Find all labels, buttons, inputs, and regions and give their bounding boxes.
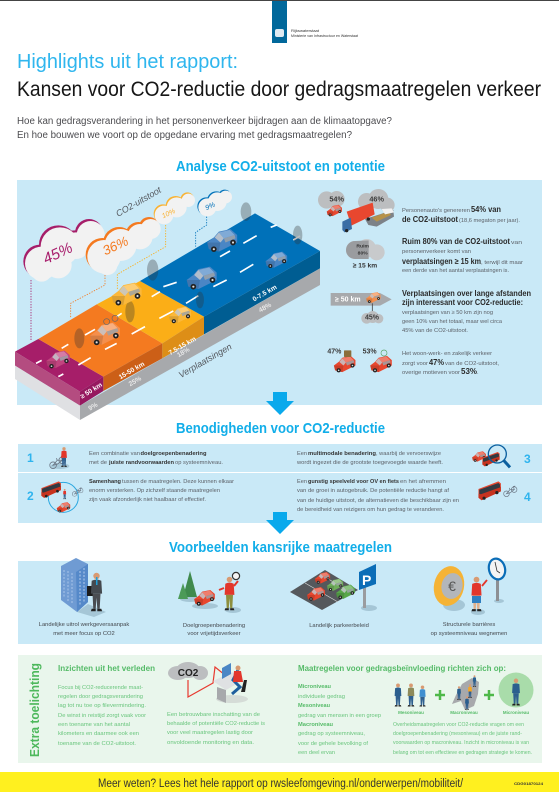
fact: 80 percent long trips: van: [511, 240, 522, 246]
axis label: CO2-uitstoot: CO2-uitstoot: [114, 185, 163, 219]
title: [17, 51, 541, 101]
dotted connectors: [31, 217, 207, 340]
fact: passenger cars: Personenauto's genereren: [402, 208, 470, 214]
label: at least 15 km: ≥ 15 km: [353, 263, 377, 270]
example: structural barriers: Structurele barrières: [443, 622, 495, 628]
segment labels: 18%: [176, 346, 191, 359]
text: monitoring: [167, 712, 265, 746]
intro questions: [17, 116, 392, 141]
text: gunstig speelveld: van de groei in autogebruik. De potentiële reductie hangt af: [297, 488, 449, 494]
numbers: 1: [27, 451, 34, 465]
text: inzichten: toename van de CO2-uitstoot.: [58, 741, 136, 747]
text: inzichten: [58, 685, 146, 747]
text: niveaus: gedrag op systeemniveau,: [298, 731, 365, 737]
text: overheidsmaatregelen: voorwaarden op macroniveau. Inzicht in microniveau is van: [393, 740, 529, 746]
arrow: at least 50 km: [331, 292, 392, 312]
road markings: [36, 225, 300, 377]
text: inzichten: regelen door gedragsverandering: [58, 694, 143, 700]
text: niveaus: [298, 684, 381, 756]
intro questions: Hoe kan gedragsverandering in het personenverkeer bijdragen aan de klimaatopgave?: [17, 116, 392, 127]
fact: long distance: 45% van de CO2-uitstoot.: [402, 328, 468, 334]
icon: commuting car 47 percent: 47%: [327, 348, 342, 355]
fact: commuting share: .: [477, 370, 479, 376]
footer bar: Meer weten? Lees het hele rapport op rwsleefomgeving.nl/onderwerpen/mobiliteit/: [98, 778, 464, 790]
text: monitoring: behaalde of potentiële CO2-reductie is: [167, 721, 265, 727]
panel: examples: [18, 557, 542, 644]
labels 54 and 46 percent: 54%: [329, 195, 344, 204]
text: monitoring: voor veel maatregelen lastig door: [167, 730, 253, 736]
text: monitoring: onvoldoende monitoring en data.: [167, 740, 254, 746]
text: niveaus: Microniveau: [298, 684, 332, 690]
cloud: ruim 80 percent: Ruim: [356, 244, 369, 250]
text: monitoring: Een betrouwbare inschatting van de: [167, 712, 260, 718]
fact: 80 percent long trips: een derde van het aantal verplaatsingen is.: [402, 268, 509, 274]
icon: mesoniveau group: Mesoniveau: [398, 710, 424, 715]
icon: mesoniveau group: [395, 683, 426, 715]
panel: extra toelichting: [18, 655, 542, 763]
numbers: 4: [524, 490, 531, 504]
panel: requirements: [18, 444, 542, 523]
segment labels: 9%: [87, 402, 99, 412]
fact: commuting share: [402, 351, 499, 376]
fact: passenger cars: de CO2-uitstoot: [402, 215, 458, 224]
cloud: 45 percent: 45%: [365, 315, 380, 322]
cloud: 36%: [86, 217, 161, 275]
text: samenhang: tussen de maatregelen. Deze kunnen elkaar: [122, 479, 234, 485]
text block: key figures: [402, 205, 531, 376]
fact: passenger cars: 54% van: [471, 205, 501, 214]
example: target groups leisure: Doelgroepenbenadering: [183, 623, 245, 629]
text: doelgroepenbenadering: met de: [89, 460, 107, 466]
text: multimodale benadering: wordt ingezet die de grootste toegevoegde waarde heeft.: [296, 460, 443, 466]
text: doelgroepenbenadering: juiste randvoorwaarden: [108, 460, 175, 466]
example: employer approach: [39, 558, 129, 637]
text: niveaus: voor de gehele bevolking of: [298, 741, 368, 747]
heading: inzichten: Inzichten uit het verleden: [58, 664, 155, 673]
numbers: 2: [27, 489, 34, 503]
text: gunstig speelveld: van de huidige uitstoot, de alternatieven die beschikbaar zijn en: [297, 498, 459, 504]
fact: 80 percent long trips: , terwijl dit maar: [481, 260, 523, 266]
text: gunstig speelveld: de bereidheid van reizigers om hun gedrag te veranderen.: [297, 507, 444, 513]
fact: long distance: verplaatsingen van ≥ 50 km zijn nog: [402, 310, 493, 316]
fact: commuting share: van de CO2-uitstoot,: [445, 361, 499, 367]
example: parking policy: Landelijk parkeerbeleid: [309, 623, 369, 629]
segment labels: 0-7.5 km: [252, 284, 278, 303]
text: niveaus: een deel ervan: [298, 750, 335, 756]
text: niveaus: gedrag van mensen in een groep: [298, 713, 381, 719]
cloud: 10%: [154, 192, 195, 224]
text: samenhang: [89, 479, 234, 503]
segment labels: 7.5-15 km: [168, 336, 198, 357]
heading: voorbeelden: Voorbeelden kansrijke maatregelen: [169, 539, 392, 556]
icon: macroniveau map: [450, 675, 479, 715]
footer bar: CDG01870124: [514, 782, 543, 786]
icon: plus: [484, 690, 494, 700]
logo: Rijkswaterstaat: Rijkswaterstaat: [291, 29, 319, 33]
example: structural barriers: [430, 557, 507, 637]
text: multimodale benadering: Een: [297, 451, 307, 457]
text: samenhang: Samenhang: [89, 479, 122, 485]
text: overheidsmaatregelen: doelgroepenbenadering (mesoniveau) en de juiste rand-: [393, 731, 522, 737]
text: gunstig speelveld: gunstig speelveld voor OV en fiets: [308, 479, 399, 485]
cloud: 9%: 9%: [204, 201, 217, 212]
icon: microniveau person: Microniveau: [503, 710, 529, 715]
numbers: 3: [524, 452, 531, 466]
segment labels: [79, 284, 278, 412]
cloud: 10%: 10%: [161, 208, 177, 220]
fact: long distance: Verplaatsingen over lange afstanden: [402, 289, 531, 298]
fact: commuting share: 47%: [429, 358, 444, 367]
example: structural barriers: €: [448, 578, 456, 594]
cars on road: [46, 229, 287, 368]
icon: microniveau person: [498, 672, 534, 715]
text: multimodale benadering: [296, 451, 443, 466]
text: niveaus: Macroniveau: [298, 722, 334, 728]
text: niveaus: Mesoniveau: [298, 703, 331, 709]
text: doelgroepenbenadering: op systeemniveau.: [175, 460, 223, 466]
text: inzichten: kilometers en daarmee ook een: [58, 731, 139, 737]
arrow: at least 50 km: ≥ 50 km: [335, 297, 361, 304]
text: overheidsmaatregelen: [393, 722, 532, 756]
icon: connected transport modes: [41, 481, 83, 512]
logo: Rijkswaterstaat: Ministerie van Infrastructuur en Waterstaat: [291, 34, 358, 38]
example: parking policy: [290, 564, 377, 629]
text: inzichten: Focus bij CO2-reducerende maat-: [58, 685, 143, 691]
cloud: 36%: 36%: [100, 233, 131, 258]
text: doelgroepenbenadering: [89, 451, 223, 466]
cloud: ruim 80 percent: [346, 239, 385, 260]
icon: boat: [365, 208, 394, 227]
icon: macroniveau map: Macroniveau: [450, 710, 478, 715]
text: samenhang: enorm versterken. Op zichzelf staande maatregelen: [89, 488, 220, 494]
footer bar: [0, 772, 559, 792]
labels 54 and 46 percent: 46%: [369, 194, 384, 203]
fact: long distance: geen 10% van het totaal, maar wel circa: [402, 319, 503, 325]
text: inzichten: De winst in reistijd zorgt vaak voor: [58, 713, 146, 719]
segment labels: 15-50 km: [118, 361, 146, 381]
panel: analyse background: [17, 180, 542, 405]
fact: commuting share: overige motieven voor: [402, 370, 460, 376]
fact: commuting share: Het woon-werk- en zakelijk verkeer: [402, 351, 492, 357]
text: doelgroepenbenadering: doelgroepenbenadering: [140, 451, 207, 457]
fact: 80 percent long trips: personenverkeer komt van: [402, 249, 471, 255]
text: overheidsmaatregelen: belang om tot een effectieve en gedragen strategie te komen.: [393, 750, 532, 756]
text: niveaus: individuele gedrag: [298, 694, 345, 700]
text: samenhang: zijn vaak afzonderlijk niet haalbaar of effectief.: [89, 497, 206, 503]
icon: plus: [435, 690, 445, 700]
icon: leisure car 53 percent: 53%: [363, 348, 377, 355]
text: gunstig speelveld: en het afremmen: [400, 479, 446, 485]
intro questions: En hoe bouwen we voort op de opgedane ervaring met gedragsmaatregelen?: [17, 130, 352, 141]
cloud: 45%: [23, 219, 105, 282]
fact: long distance: [402, 289, 531, 334]
example: structural barriers: op systeemniveau wegnemen: [431, 631, 507, 637]
segment labels: ≥ 50 km: [79, 382, 104, 400]
icon: bus and bicycle: [478, 481, 517, 500]
cloud: 9%: [197, 190, 232, 216]
axis label: verplaatsingen: Verplaatsingen: [177, 342, 233, 380]
icon: red car: [327, 205, 342, 216]
fact: 80 percent long trips: [402, 237, 523, 274]
text: inzichten: lag tot nu toe op filevermindering.: [58, 703, 146, 709]
text: gunstig speelveld: Een: [297, 479, 307, 485]
text: multimodale benadering: , waarbij de vervoerswijze: [376, 451, 441, 457]
icon: truck: [342, 203, 375, 232]
labels 54 and 46 percent: [329, 194, 384, 204]
fact: commuting share: zorgt voor: [402, 361, 428, 367]
cloud: ruim 80 percent: 80%: [358, 250, 368, 256]
title: Highlights uit het rapport:: [17, 51, 238, 73]
chart: isometric road of trips and emissions: [15, 185, 320, 420]
arrow: down to requirements: [266, 392, 294, 415]
numbers: [27, 451, 531, 504]
icon: leisure car 53 percent: [363, 348, 392, 372]
fact: passenger cars: (18,6 megaton per jaar).: [459, 218, 520, 224]
exhaust shadows: [74, 202, 302, 348]
heading: benodigheden: Benodigheden voor CO2-reductie: [176, 420, 385, 437]
icon: CO2 monitoring: [168, 662, 248, 703]
arrow: down to examples: [266, 512, 294, 534]
cloud: 45 percent: [361, 311, 383, 324]
fact: passenger cars: [402, 205, 520, 224]
fact: 80 percent long trips: Ruim 80% van de CO2-uitstoot: [402, 237, 510, 246]
icon: CO2 monitoring: CO2: [178, 668, 199, 679]
logo: Rijkswaterstaat: [272, 1, 358, 43]
fact: commuting share: 53%: [461, 367, 477, 376]
fact: 80 percent long trips: verplaatsingen ≥ 15 km: [402, 257, 481, 266]
example: parking policy: P: [362, 572, 371, 588]
text: multimodale benadering: multimodale benadering: [308, 451, 377, 457]
segment labels: 48%: [258, 302, 273, 314]
heading: maatregelen: Maatregelen voor gedragsbeïnvloeding richten zich op:: [298, 663, 506, 673]
text: overheidsmaatregelen: Overheidsmaatregelen voor CO2-reductie vragen om een: [393, 722, 524, 728]
clouds 54 and 46 percent: [318, 189, 395, 212]
example: target groups leisure: voor vrijetijdsverkeer: [187, 631, 241, 637]
icons: key figures: [318, 189, 395, 372]
text: gunstig speelveld: [297, 479, 459, 513]
example: target groups leisure: [178, 571, 245, 637]
segment labels: 25%: [128, 375, 143, 388]
icon: commuting car 47 percent: [327, 348, 355, 372]
heading: analyse: Analyse CO2-uitstoot en potentie: [176, 158, 385, 175]
icon: magnifier on bus: [472, 445, 510, 467]
cloud: 45%: 45%: [40, 240, 75, 268]
icon: cyclist: [50, 447, 69, 469]
example: employer approach: met meer focus op CO2: [53, 631, 115, 637]
label: extra toelichting: Extra toelichting: [27, 663, 42, 757]
fact: long distance: zijn interessant voor CO2-reductie:: [402, 298, 523, 307]
text: doelgroepenbenadering: Een combinatie van: [89, 451, 140, 457]
example: employer approach: Landelijke uitrol werkgeversaanpak: [39, 622, 129, 628]
text: inzichten: een toename van het aantal: [58, 722, 130, 728]
